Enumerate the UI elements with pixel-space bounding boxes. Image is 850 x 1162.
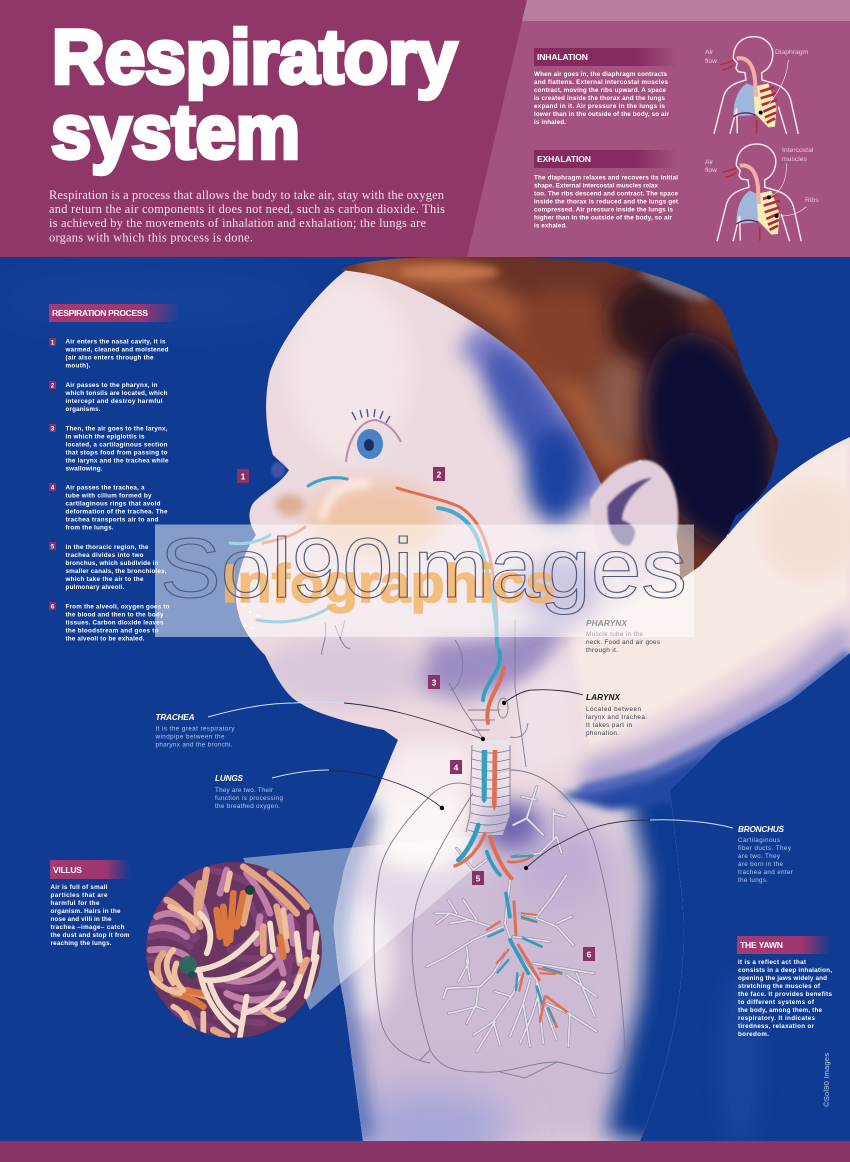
yawn heading: THE YAWN: [740, 940, 783, 950]
panel: exhalation: [534, 144, 819, 241]
label: bronchus: [738, 825, 793, 884]
marker 1: 1: [241, 472, 246, 482]
step 2: intercept and destroy harmful: [66, 398, 163, 405]
marker 6: [583, 947, 595, 961]
label: lungs: the breathed oxygen.: [215, 803, 280, 810]
step 3: 3: [51, 426, 55, 432]
step 5: [49, 542, 167, 591]
panel: respiration process: [49, 304, 180, 642]
label: trachea: TRACHEA: [156, 713, 195, 722]
step 3: Then, the air goes to the larynx,: [66, 426, 168, 432]
respiration process heading: [49, 304, 180, 322]
inhalation heading: [534, 48, 678, 66]
photo: hair: [340, 257, 779, 580]
yawn text: consists in a deep inhalation,: [738, 967, 832, 974]
step 5: which take the air to the: [64, 576, 144, 583]
credit line: ©Sol90 Images: [822, 1053, 831, 1107]
step 4: [49, 483, 168, 532]
label: lungs: function is processing: [215, 795, 283, 802]
lungs outline: [374, 770, 626, 1078]
neck and chin shadow: [260, 618, 580, 800]
label: larynx: phonation.: [586, 730, 619, 737]
photo: baby body and face: [220, 260, 850, 1162]
inhalation diagram: flow: [705, 58, 717, 65]
villus text: particles that are: [50, 892, 108, 899]
villus text: trachea –image– catch: [50, 924, 125, 931]
airflow arrows: head and neck: [230, 478, 504, 723]
trachea and larynx: [322, 620, 528, 835]
step 2: 2: [51, 383, 55, 389]
label: bronchus: Cartilaginous: [738, 837, 780, 844]
marker 6: 6: [587, 950, 592, 960]
title: Respiratory: [52, 15, 457, 100]
exhalation heading: [534, 150, 678, 168]
inhalation diagram: Diaphragm: [775, 49, 809, 56]
label: lungs: LUNGS: [215, 774, 244, 783]
step 5: pulmonary alveoli.: [66, 584, 125, 591]
blue water background: [0, 257, 850, 1162]
header: magenta title panel: [0, 0, 850, 257]
exhalation text: is exhaled.: [534, 222, 567, 230]
exhalation diagram: Ribs: [805, 197, 819, 204]
step 5: In the thoracic region, the: [66, 544, 149, 551]
step 1: mouth).: [66, 362, 91, 370]
watermark: Sol90images: [160, 521, 687, 615]
villus text: Air is full of small: [50, 884, 108, 891]
step 1: warmed, cleaned and moistened: [64, 346, 169, 354]
step number markers on the diagram: [237, 467, 595, 961]
marker 3: 3: [432, 678, 437, 688]
step 1: Air enters the nasal cavity, it is: [66, 338, 166, 346]
exhalation text: too. The ribs descend and contract. The space: [534, 190, 678, 198]
step 2: [49, 381, 168, 413]
label: lungs: They are two. Their: [215, 787, 273, 794]
yawn text: the face. It provides benefits: [738, 991, 832, 998]
step 5: bronchus, which subdivide in: [66, 560, 159, 567]
panel: the yawn: [737, 936, 832, 1038]
step 3: the larynx and the trachea while: [66, 458, 169, 464]
step 6: tissues. Carbon dioxide leaves: [66, 620, 164, 626]
yawn text: tiredness, relaxation or: [738, 1023, 815, 1030]
yawn text: opening the jaws widely and: [738, 975, 827, 982]
yawn text: respiratory. It indicates: [738, 1015, 815, 1022]
step 3: swallowing.: [66, 466, 103, 472]
step 3: located, a cartilaginous section: [66, 442, 168, 448]
label: pharynx: through it.: [586, 647, 618, 654]
exhalation text: compressed. Air pressure inside the lungs is: [534, 206, 673, 214]
panel: inhalation: [534, 37, 809, 134]
label: pharynx: neck. Food and air goes: [586, 639, 660, 646]
step 4: from the lungs.: [66, 524, 114, 532]
step 4: Air passes the trachea, a: [66, 484, 145, 492]
step 1: [49, 338, 169, 370]
marker 4: 4: [454, 762, 459, 772]
label: larynx: [586, 693, 647, 737]
marker 4: [450, 760, 462, 774]
intro paragraph: Respiration is a process that allows the body to take air, stay with the oxygen: [49, 188, 444, 202]
panel: villus: [50, 860, 130, 947]
title: system: [51, 90, 300, 175]
inhalation text: is created inside the thorax and the lungs: [534, 95, 665, 102]
intro paragraph: is achieved by the movements of inhalation and exhalation; the lungs are: [49, 216, 426, 230]
label: trachea: It is the great respiratory: [156, 726, 235, 732]
label: pharynx: Muscle tube in the: [586, 631, 643, 638]
label: bronchus: trachea and enter: [738, 869, 793, 876]
inhalation text: lower than in the outside of the body, so air: [534, 111, 670, 118]
step 1: 1: [51, 340, 55, 346]
step 6: 6: [51, 604, 55, 610]
step 4: deformation of the trachea. The: [66, 508, 168, 516]
villus text: [50, 884, 130, 947]
label: larynx: larynx and trachea.: [586, 714, 647, 721]
torso shading: [325, 770, 678, 1162]
photo: ear: [590, 460, 678, 585]
airflow arrows: trachea and bronchi: [455, 750, 567, 1027]
exhalation diagram: [705, 144, 819, 241]
step 2: which tonsils are located, which: [64, 390, 168, 397]
label: trachea: windpipe between the: [154, 734, 225, 740]
bottom magenta band: [0, 1141, 850, 1162]
marker 5: [472, 871, 484, 885]
marker 3: [428, 675, 440, 689]
respiration process heading: RESPIRATION PROCESS: [52, 308, 148, 318]
intro paragraph: [49, 188, 445, 244]
inhalation text: is inhaled.: [534, 119, 566, 126]
step 3: in which the epiglottis is: [66, 434, 145, 440]
exhalation diagram: Intercostal: [782, 147, 814, 154]
step 5: trachea divides into two: [66, 552, 144, 559]
step 4: 4: [51, 485, 55, 491]
step 1: (air also enters through the: [66, 354, 154, 362]
villus text: nose and villi in the: [50, 916, 112, 923]
inhalation text: expand in it. Air pressure in the lungs is: [534, 103, 665, 110]
villus text: harmful for the: [50, 900, 100, 907]
watermark: Infographics: [222, 554, 556, 614]
label: bronchus: fiber ducts. They: [738, 845, 792, 852]
exhalation text: [534, 174, 679, 230]
villus micrograph circle: [146, 862, 322, 1038]
step 6: the alveoli to be exhaled.: [66, 636, 145, 642]
yawn text: boredom.: [738, 1031, 769, 1038]
villus heading: VILLUS: [53, 865, 82, 875]
exhalation text: shape. External intercostal muscles relax: [534, 182, 658, 190]
exhalation diagram: flow: [705, 167, 717, 174]
step 5: 5: [51, 544, 55, 550]
label: bronchus: are born in the: [738, 861, 783, 868]
label: larynx: LARYNX: [586, 693, 621, 702]
exhalation diagram: Air: [705, 159, 714, 166]
marker 2: 2: [437, 470, 442, 480]
marker 1: [237, 469, 249, 483]
step 2: organisms.: [66, 406, 101, 413]
inhalation text: When air goes in, the diaphragm contracts: [534, 71, 667, 78]
exhalation heading: EXHALATION: [537, 154, 591, 164]
exhalation text: inside the thorax is reduced and the lungs get: [534, 198, 679, 206]
label: bronchus: BRONCHUS: [738, 825, 785, 834]
yawn text: It is a reflect act that: [738, 959, 807, 966]
step 4: trachea transports air to and: [66, 516, 159, 524]
villus text: organism. Hairs in the: [50, 908, 121, 915]
label: pharynx: [586, 619, 660, 654]
marker 2: [433, 467, 445, 481]
inhalation heading: INHALATION: [537, 52, 588, 62]
label: lungs: [215, 774, 283, 810]
yawn text: [738, 959, 832, 1038]
yawn text: the body, among them, the: [738, 1007, 822, 1014]
photo: eye: [271, 409, 405, 478]
header: top pale strip: [522, 0, 850, 21]
intro paragraph: organs with which this process is done.: [49, 230, 253, 244]
step 6: the bloodstream and goes to: [66, 628, 159, 634]
exhalation text: The diaphragm relaxes and recovers its initial: [534, 174, 678, 182]
zoom cone from lungs to villus: [243, 836, 472, 1010]
step 5: smaller canals, the bronchioles,: [66, 568, 167, 575]
step 4: cartilaginous rings that avoid: [66, 500, 161, 508]
inhalation text: contract, moving the ribs upward. A space: [534, 87, 666, 94]
villus text: reaching the lungs.: [50, 940, 112, 947]
intro paragraph: and return the air components it does not need, such as carbon dioxide. This: [49, 202, 445, 216]
yawn text: stretching the muscles of: [738, 983, 821, 990]
inhalation diagram: [705, 37, 809, 134]
exhalation text: higher than in the outside of the body, so air: [534, 214, 673, 222]
marker 5: 5: [476, 874, 481, 884]
armpit shadow: [560, 736, 730, 810]
label: trachea: pharynx and the bronchi.: [156, 742, 233, 748]
inhalation text: [534, 71, 670, 126]
bronchial tree: [427, 787, 597, 1052]
step 4: tube with cilium formed by: [66, 492, 152, 500]
step 6: [49, 602, 170, 642]
mouth bubbles: [242, 603, 259, 630]
label: larynx: It takes part in: [586, 722, 632, 729]
step 3: that stops food from passing to: [66, 450, 168, 456]
title: [51, 15, 457, 175]
label: pharynx: PHARYNX: [586, 619, 628, 628]
label: larynx: Located between: [586, 706, 641, 713]
label: trachea: [154, 713, 235, 748]
step 2: Air passes to the pharynx, in: [66, 382, 158, 389]
step 3: [49, 424, 169, 472]
inhalation text: and flattens. External intercostal muscles: [534, 79, 668, 86]
exhalation diagram: muscles: [782, 156, 808, 163]
arm: [568, 437, 850, 790]
inhalation diagram: Air: [705, 49, 714, 56]
label: bronchus: the lungs.: [738, 877, 768, 884]
step 6: the blood and then to the body: [66, 612, 164, 618]
step 6: From the alveoli, oxygen goes to: [66, 604, 170, 610]
label: bronchus: are two. They: [738, 853, 781, 860]
yawn text: to different systems of: [738, 999, 815, 1006]
face shading: [275, 280, 600, 636]
leader lines and dots: [208, 690, 733, 870]
header: right lighter panel: [467, 0, 850, 257]
villus text: the dust and stop it from: [50, 932, 130, 939]
